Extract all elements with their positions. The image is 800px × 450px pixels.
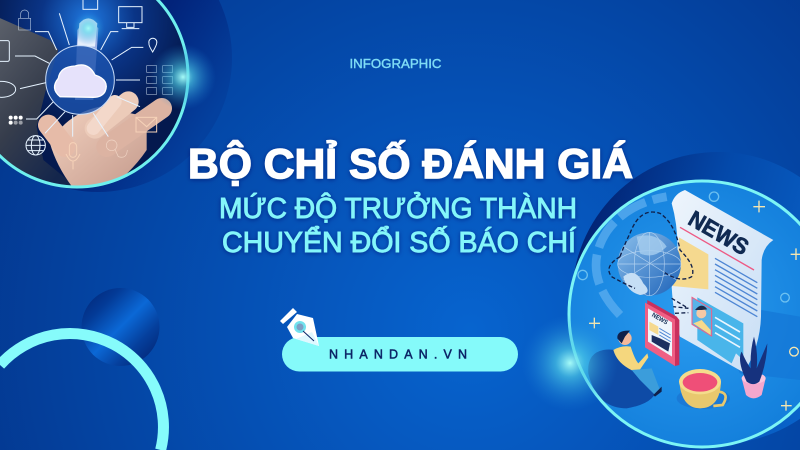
potted plant [740,337,767,398]
icon: folders [147,66,173,94]
decorative sphere [82,288,160,366]
glow left [150,44,216,110]
tablet [645,300,679,366]
icon: oval tag [0,81,16,97]
dark blob behind left circle [0,0,232,192]
newspaper [672,190,773,373]
icon: lock [19,10,31,30]
subtitle: MỨC ĐỘ TRƯỞNG THÀNH [219,191,577,225]
icon: stethoscope [106,140,127,157]
yellow box [673,237,708,289]
left photo circle: hand touching cloud [0,0,188,190]
label: INFOGRAPHIC: INFOGRAPHIC [350,57,442,71]
cloud [55,65,106,97]
dark blob behind right circle [572,152,800,444]
icon: top box [83,0,98,9]
hand [48,18,162,188]
tea cup [677,369,730,409]
portrait [692,297,712,336]
title: BỘ CHỈ SỐ ĐÁNH GIÁ [188,139,633,187]
dashed orbit [609,212,693,288]
icon: dots [9,116,23,125]
wave arcs [596,197,667,315]
person on beanbag [588,331,662,408]
icon: globe [26,136,45,155]
sparkles [589,201,800,411]
icon: envelope [136,117,157,132]
glow right [522,315,618,411]
left circle outline [0,0,188,187]
pen nib icon [280,308,319,346]
suit sleeve [0,18,71,186]
fingertip glow [74,16,102,44]
globe [618,232,681,296]
blue quote box [697,297,743,363]
text lines [715,258,757,317]
icon: map pin [149,38,157,52]
icon: monitor [119,7,142,29]
tablet: NEWS [650,312,669,326]
pill: NHANDAN.VN: NHANDAN.VN [329,348,467,362]
subtitle: CHUYỂN ĐỔI SỐ BÁO CHÍ [222,225,577,259]
cyan ring bottom left [0,334,163,450]
central circle [46,46,114,114]
dashed link [672,298,688,313]
pill: NHANDAN.VN [282,337,518,372]
small rings [578,192,798,356]
icon: microphone [66,143,80,169]
network lines and icons [0,0,173,169]
right illustration circle: news [569,181,800,447]
right circle outline [569,181,800,447]
icon: tablet [0,41,9,61]
darker shadow of paper [738,310,800,380]
subtitle [219,191,577,259]
headline NEWS: NEWS [684,205,753,260]
